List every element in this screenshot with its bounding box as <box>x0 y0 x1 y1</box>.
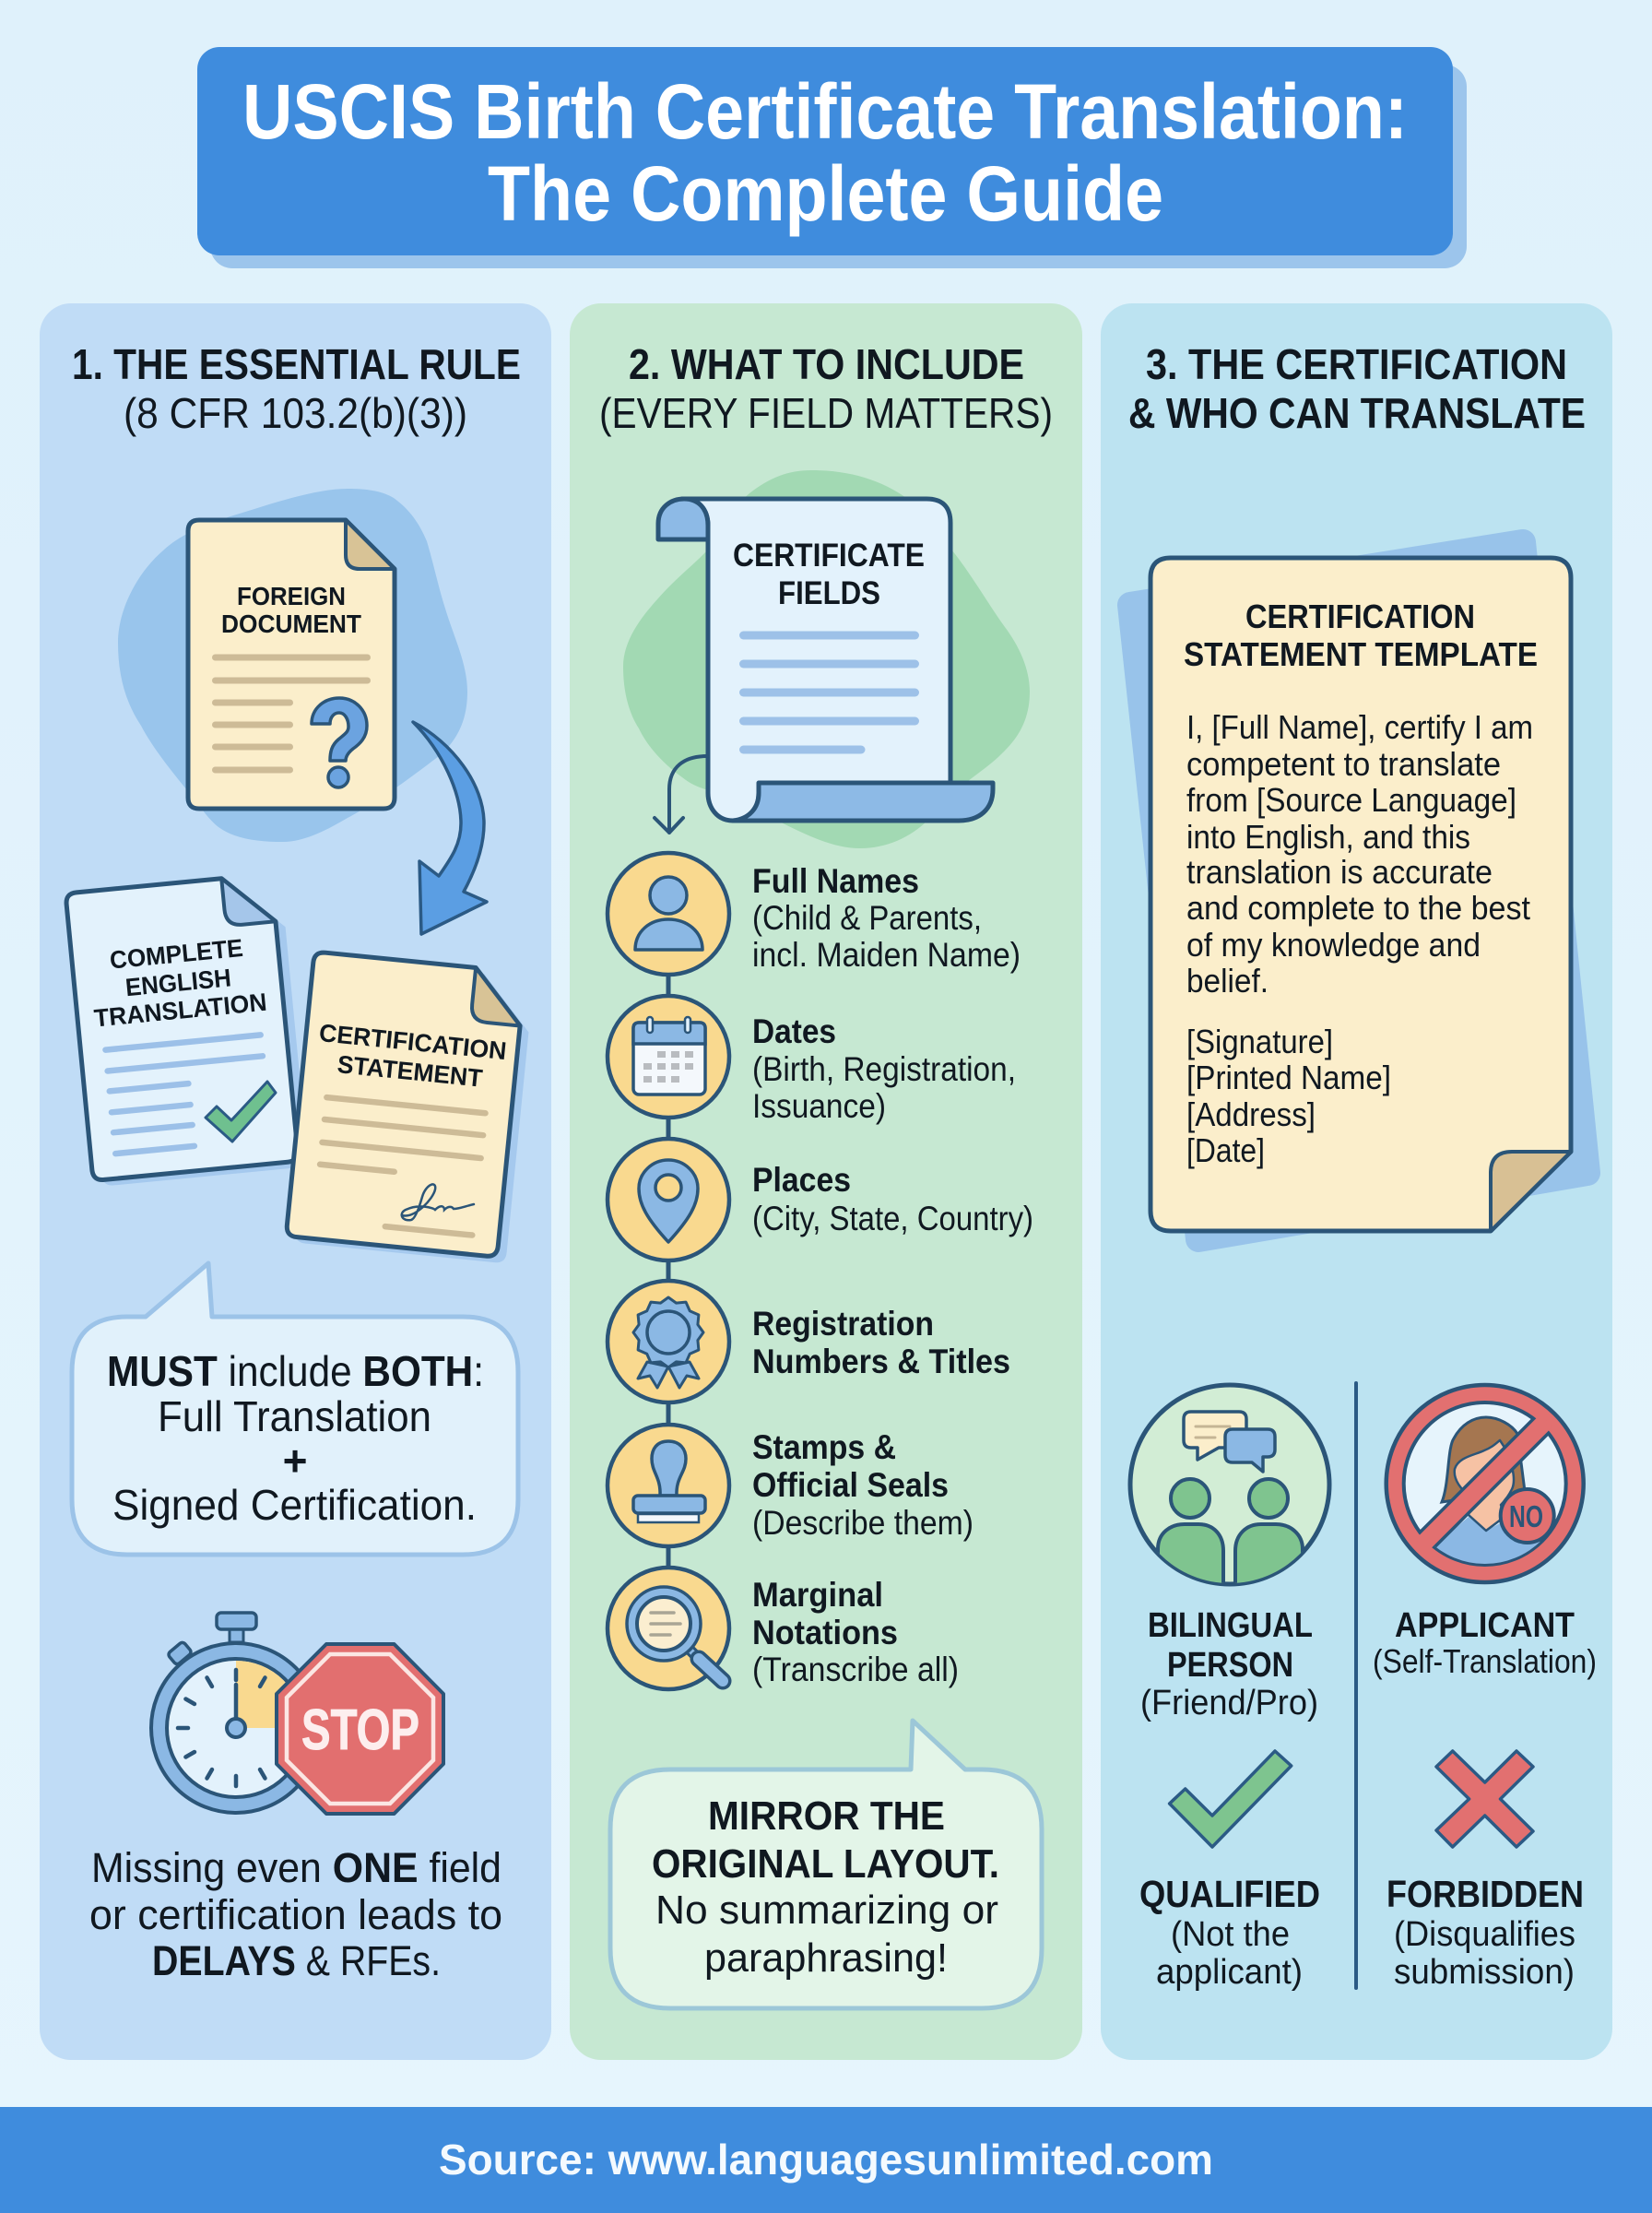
field: dates: Dates <box>752 1012 836 1050</box>
icon: no self-translation <box>1386 1385 1584 1582</box>
panel: the essential rule <box>40 303 551 2060</box>
warning text <box>89 1844 502 1984</box>
heading: essential rule <box>72 340 521 437</box>
card: certification statement template: [Address] <box>1186 1095 1316 1133</box>
callout: mirror the original layout: No summarizing or <box>655 1888 998 1933</box>
icon: certification statement: STATEMENT <box>336 1050 484 1093</box>
field: registration numbers and titles: Numbers & Titles <box>752 1343 1010 1380</box>
heading: essential rule: 1. THE ESSENTIAL RULE <box>72 340 521 388</box>
field: full names: (Child & Parents, <box>752 899 982 937</box>
warning text: or certification leads to <box>89 1891 502 1938</box>
arrow: document to translation <box>413 722 487 934</box>
card: certification statement template: and complete to the best <box>1186 889 1530 927</box>
field: stamps and official seals: (Describe them) <box>752 1504 974 1542</box>
card: certification statement template: [Printed Name] <box>1186 1059 1391 1096</box>
label: forbidden: FORBIDDEN <box>1386 1873 1584 1915</box>
icon: bilingual people <box>1130 1385 1329 1595</box>
field: full names <box>608 853 1021 975</box>
icon: red cross <box>1436 1751 1533 1847</box>
field: stamps and official seals <box>608 1425 974 1546</box>
title banner <box>197 47 1467 268</box>
icon: complete english translation: TRANSLATION <box>93 988 268 1033</box>
icon: foreign document <box>188 520 395 809</box>
icon: complete english translation: ENGLISH <box>124 964 232 1001</box>
card: certification statement template: I, [Full Name], certify I am <box>1186 708 1533 746</box>
background blob <box>623 470 1030 848</box>
field: stamps and official seals: Official Seals <box>752 1466 949 1504</box>
divider <box>1354 1383 1358 1988</box>
callout: mirror the original layout: ORIGINAL LAYOUT. <box>652 1841 999 1887</box>
heading: essential rule: (8 CFR 103.2(b)(3)) <box>124 389 467 437</box>
callout: must include both: Signed Certification. <box>112 1481 477 1529</box>
icon: check mark <box>1170 1751 1292 1847</box>
card: certification statement template: STATEMENT TEMPLATE <box>1184 635 1538 673</box>
label: qualified <box>1139 1873 1320 1992</box>
icon: stop sign: STOP <box>301 1698 419 1762</box>
icon: certification statement: CERTIFICATION <box>318 1019 508 1065</box>
label: qualified: applicant) <box>1156 1953 1303 1992</box>
label: bilingual person <box>1140 1606 1318 1722</box>
label: qualified: QUALIFIED <box>1139 1873 1320 1915</box>
callout: must include both: + <box>283 1437 307 1485</box>
icon: no self-translation: NO <box>1509 1499 1543 1533</box>
footer source bar <box>0 2107 1652 2213</box>
callout: must include both <box>72 1263 518 1555</box>
field: registration numbers and titles: Registration <box>752 1305 934 1343</box>
label: forbidden: (Disqualifies <box>1394 1915 1575 1954</box>
card: certification statement template <box>1150 558 1571 1231</box>
label: bilingual person: BILINGUAL <box>1148 1606 1313 1645</box>
background blob <box>118 489 467 842</box>
card: certification statement template: from [Source Language] <box>1186 781 1516 819</box>
label: forbidden <box>1386 1873 1584 1992</box>
field: marginal notations: Marginal <box>752 1576 883 1614</box>
icon: certificate scroll <box>658 499 993 821</box>
field: marginal notations: (Transcribe all) <box>752 1651 959 1688</box>
field: full names: Full Names <box>752 862 919 900</box>
callout: must include both: MUST include BOTH: <box>107 1347 484 1395</box>
card: certification statement template: [Signature] <box>1186 1023 1333 1060</box>
certification template background sheet <box>1130 542 1587 1239</box>
card: certification statement template: of my knowledge and <box>1186 926 1481 964</box>
heading: what to include <box>599 340 1053 437</box>
timeline connectors <box>666 975 671 1568</box>
icon: certificate scroll: CERTIFICATE <box>733 538 925 574</box>
panel: certification and who can translate <box>1101 303 1612 2060</box>
field: full names: incl. Maiden Name) <box>752 936 1021 974</box>
heading: certification <box>1128 340 1586 437</box>
icon: green check on translation <box>206 1082 276 1142</box>
icon: foreign document: FOREIGN <box>237 582 346 610</box>
icon: certificate scroll: FIELDS <box>778 575 880 611</box>
field: registration numbers and titles <box>608 1281 1010 1402</box>
icon: complete english translation <box>65 873 309 1188</box>
field: dates: Issuance) <box>752 1087 886 1125</box>
heading: certification: 3. THE CERTIFICATION <box>1146 340 1567 388</box>
field: marginal notations <box>608 1568 959 1689</box>
heading: what to include: 2. WHAT TO INCLUDE <box>629 340 1024 388</box>
warning text: Missing even ONE field <box>91 1844 502 1891</box>
card: certification statement template: translation is accurate <box>1186 853 1493 891</box>
card: certification statement template: into English, and this <box>1186 818 1470 856</box>
callout: mirror the original layout: MIRROR THE <box>708 1793 945 1839</box>
icon: stopwatch <box>151 1613 321 1813</box>
callout: mirror the original layout: paraphrasing! <box>704 1935 948 1981</box>
label: applicant <box>1373 1606 1597 1680</box>
field: stamps and official seals: Stamps & <box>752 1428 896 1466</box>
field: places: (City, State, Country) <box>752 1200 1033 1237</box>
heading: certification: & WHO CAN TRANSLATE <box>1128 389 1586 437</box>
icon: certification statement <box>286 952 535 1263</box>
label: forbidden: submission) <box>1394 1953 1575 1992</box>
callout: mirror the original layout <box>610 1721 1042 2008</box>
label: bilingual person: (Friend/Pro) <box>1140 1684 1318 1722</box>
footer source bar: Source: www.languagesunlimited.com <box>439 2136 1213 2183</box>
callout: must include both: Full Translation <box>158 1392 431 1440</box>
icon: signature <box>402 1184 474 1220</box>
panel: what to include <box>570 303 1082 2060</box>
field: dates <box>608 996 1016 1125</box>
field: places <box>608 1139 1033 1260</box>
label: bilingual person: PERSON <box>1167 1646 1293 1685</box>
icon: stop sign <box>277 1644 443 1814</box>
title banner: USCIS Birth Certificate Translation: <box>242 68 1408 155</box>
icon: foreign document: DOCUMENT <box>221 609 361 638</box>
card: certification statement template: competent to translate <box>1186 745 1501 783</box>
card: certification statement template: [Date] <box>1186 1131 1265 1169</box>
icon: complete english translation: COMPLETE <box>109 934 244 975</box>
label: applicant: APPLICANT <box>1395 1606 1575 1645</box>
field: marginal notations: Notations <box>752 1614 898 1651</box>
arrow: scroll to fields <box>655 756 707 833</box>
label: qualified: (Not the <box>1171 1915 1290 1954</box>
label: applicant: (Self-Translation) <box>1373 1642 1597 1680</box>
card: certification statement template: belief. <box>1186 962 1268 1000</box>
field: dates: (Birth, Registration, <box>752 1050 1016 1088</box>
heading: what to include: (EVERY FIELD MATTERS) <box>599 389 1053 437</box>
card: certification statement template: CERTIFICATION <box>1245 598 1475 635</box>
warning text: DELAYS & RFEs. <box>152 1937 441 1984</box>
field: places: Places <box>752 1161 851 1199</box>
title banner: The Complete Guide <box>488 150 1163 237</box>
